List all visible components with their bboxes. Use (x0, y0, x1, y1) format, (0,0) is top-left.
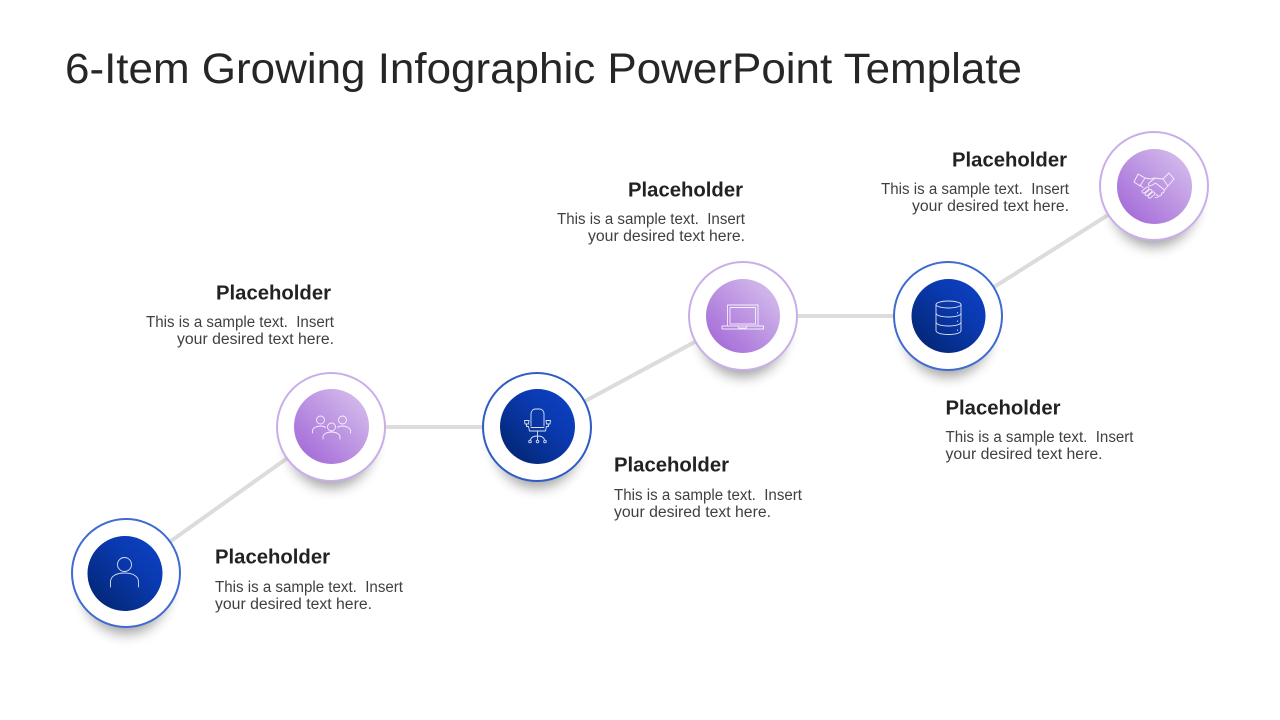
step 3: office chair (483, 373, 591, 488)
text: step 6 (881, 150, 1070, 215)
text: step 4: This is a sample text. Insert (557, 211, 746, 228)
text: step 5: This is a sample text. Insert (946, 429, 1134, 446)
icon: person (110, 558, 138, 587)
icon: laptop (722, 305, 764, 329)
text: step 1: Placeholder (215, 546, 330, 568)
text: step 6: Placeholder (952, 150, 1067, 172)
step 6: handshake (1100, 132, 1208, 247)
text: step 2: This is a sample text. Insert (146, 314, 335, 331)
text: step 4 (557, 180, 746, 245)
step 1: person (72, 519, 180, 634)
text: step 1 (215, 546, 404, 613)
text: step 5 (946, 398, 1134, 463)
text: step 2: your desired text here. (177, 331, 334, 348)
icon: team (312, 416, 350, 439)
text: step 6: your desired text here. (912, 198, 1069, 215)
text: step 3: Placeholder (614, 454, 729, 476)
text: step 2: Placeholder (216, 282, 331, 304)
text: step 3 (614, 454, 803, 521)
text: step 5: Placeholder (946, 398, 1061, 420)
step 2: team (277, 373, 385, 488)
icon: office chair (524, 409, 550, 443)
connector line through the six steps (126, 186, 1154, 573)
text: step 6: This is a sample text. Insert (881, 181, 1070, 198)
text: step 3: your desired text here. (614, 504, 771, 521)
title: 6-Item Growing Infographic PowerPoint Template (65, 45, 1022, 93)
text: step 4: your desired text here. (588, 228, 745, 245)
step 4: laptop (689, 262, 797, 377)
icon: database (936, 301, 961, 334)
text: step 5: your desired text here. (946, 446, 1102, 463)
text: step 1: your desired text here. (215, 596, 372, 613)
text: step 2 (146, 282, 335, 348)
text: step 4: Placeholder (628, 180, 743, 202)
step 5: database (894, 262, 1002, 377)
icon: handshake (1134, 173, 1174, 199)
text: step 3: This is a sample text. Insert (614, 487, 803, 504)
text: step 1: This is a sample text. Insert (215, 579, 404, 596)
